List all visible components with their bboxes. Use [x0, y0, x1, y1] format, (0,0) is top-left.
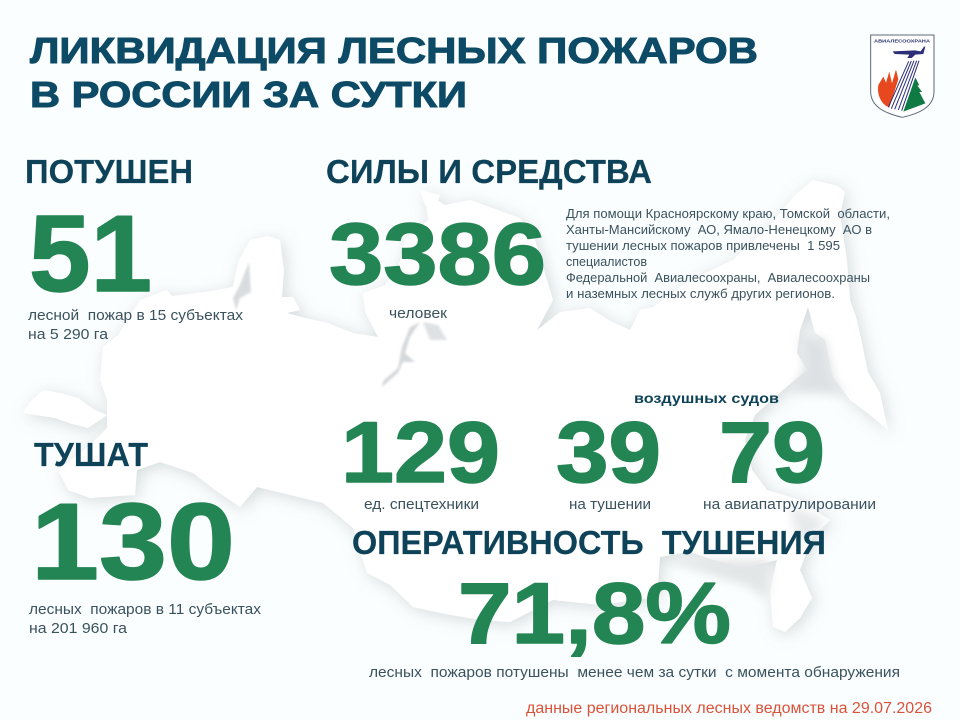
- label: aircraft: воздушных судов: [634, 390, 779, 406]
- label: people: человек: [389, 305, 447, 322]
- title: ЛИКВИДАЦИЯ ЛЕСНЫХ ПОЖАРОВ: [30, 30, 758, 71]
- number: 39: 39: [556, 405, 661, 501]
- label: special vehicles: ед. спецтехники: [364, 496, 479, 513]
- text: extinguished details: на 5 290 га: [28, 326, 109, 343]
- panel: equipment and aircraft: [341, 390, 876, 513]
- heading: extinguished: ПОТУШЕН: [25, 153, 193, 190]
- panel: extinguished: [25, 153, 244, 343]
- text: extinguished details: лесной пожар в 15 субъектах: [28, 307, 244, 324]
- source note: данные региональных лесных ведомств на 29.07.2026: [526, 700, 932, 717]
- text: active fires details: [29, 601, 262, 637]
- number: 130: 130: [31, 481, 235, 603]
- number: 129: 129: [341, 405, 500, 501]
- title: В РОССИИ ЗА СУТКИ: [30, 74, 467, 115]
- text: assistance note: специалистов: [566, 255, 647, 269]
- text: assistance note: тушении лесных пожаров привлечены 1 595: [566, 239, 840, 253]
- text: active fires details: на 201 960 га: [29, 620, 128, 637]
- heading: being extinguished: ТУШАТ: [34, 436, 148, 473]
- map of Russia: [23, 180, 888, 632]
- text: efficiency note: лесных пожаров потушены менее чем за сутки с момента обнаружения: [369, 664, 900, 681]
- label: firefighting: на тушении: [569, 496, 651, 513]
- panel: being extinguished: [29, 436, 262, 637]
- text: extinguished details: [28, 307, 244, 343]
- icon: Avialesookhrana logo: [871, 35, 934, 117]
- number: 3386: 3386: [329, 206, 546, 303]
- icon: Avialesookhrana logo: АВИАЛЕСООХРАНА: [874, 39, 931, 44]
- text: assistance note: Федеральной Авиалесоохраны, Авиалесоохраны: [566, 271, 870, 285]
- title: [30, 30, 758, 115]
- number: 71,8%: 71,8%: [458, 566, 731, 662]
- text: assistance note: Для помощи Красноярскому краю, Томской области,: [566, 207, 890, 221]
- text: active fires details: лесных пожаров в 11 субъектах: [29, 601, 262, 618]
- number: 79: 79: [719, 405, 825, 501]
- heading: forces and resources: СИЛЫ И СРЕДСТВА: [326, 153, 652, 190]
- text: assistance note: [566, 207, 890, 301]
- text: assistance note: Ханты-Мансийскому АО, Ямало-Ненецкому АО в: [566, 223, 872, 237]
- heading: response efficiency: ОПЕРАТИВНОСТЬ ТУШЕНИЯ: [352, 524, 826, 561]
- panel: forces and resources: [326, 153, 890, 322]
- label: air patrol: на авиапатрулировании: [703, 496, 876, 513]
- text: assistance note: и наземных лесных служб других регионов.: [566, 287, 835, 301]
- panel: response efficiency: [352, 524, 900, 681]
- number: 51: 51: [29, 193, 152, 315]
